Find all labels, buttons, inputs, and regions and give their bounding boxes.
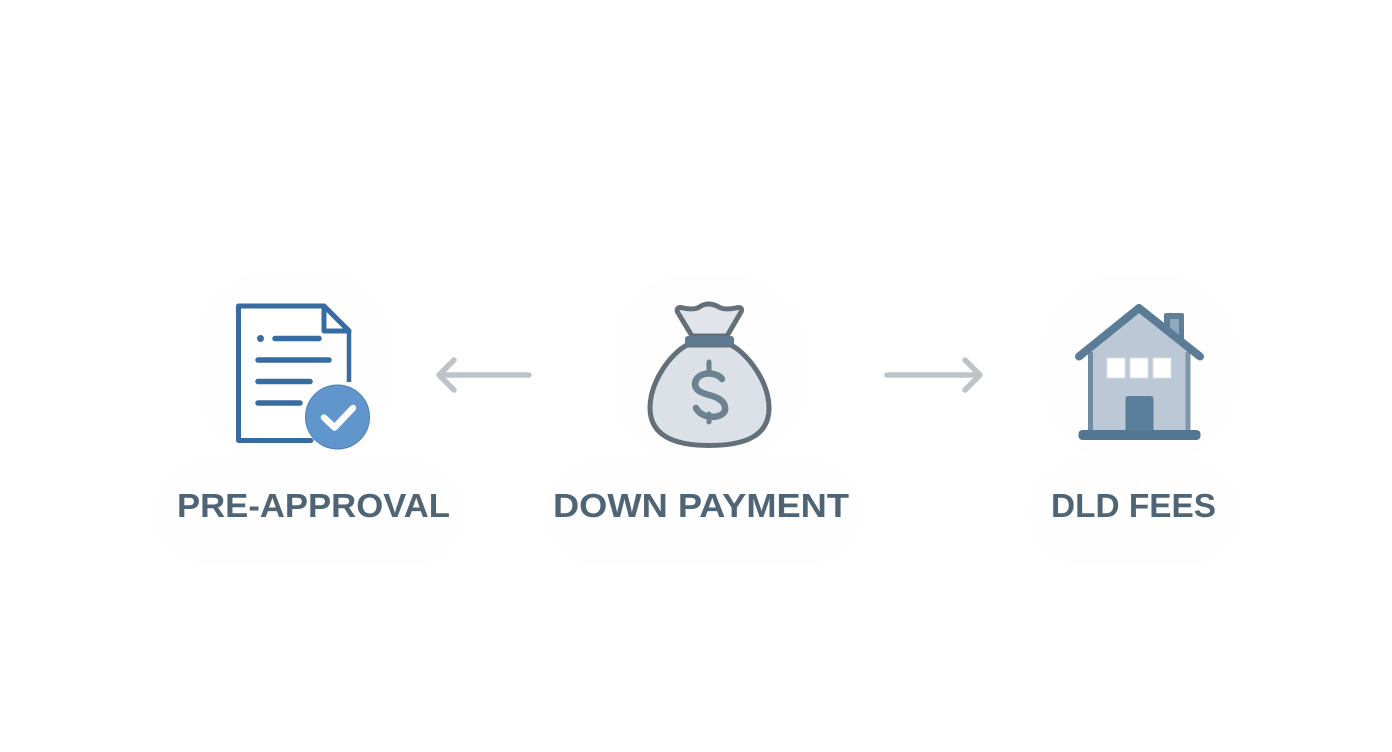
dollar sign	[695, 362, 725, 422]
icon: pre-approval document with check badge	[238, 306, 370, 449]
icon: check badge	[306, 385, 370, 449]
windows	[1107, 358, 1171, 378]
label: DLD fees: DLD FEES	[1051, 487, 1216, 524]
icon: house	[1078, 308, 1200, 440]
arrow: pointing right	[887, 360, 980, 390]
door	[1126, 396, 1154, 434]
label: down payment: DOWN PAYMENT	[553, 487, 849, 524]
label: pre-approval: PRE-APPROVAL	[177, 487, 450, 524]
icon: money bag with dollar sign	[650, 304, 769, 446]
arrow: pointing left	[439, 360, 529, 390]
